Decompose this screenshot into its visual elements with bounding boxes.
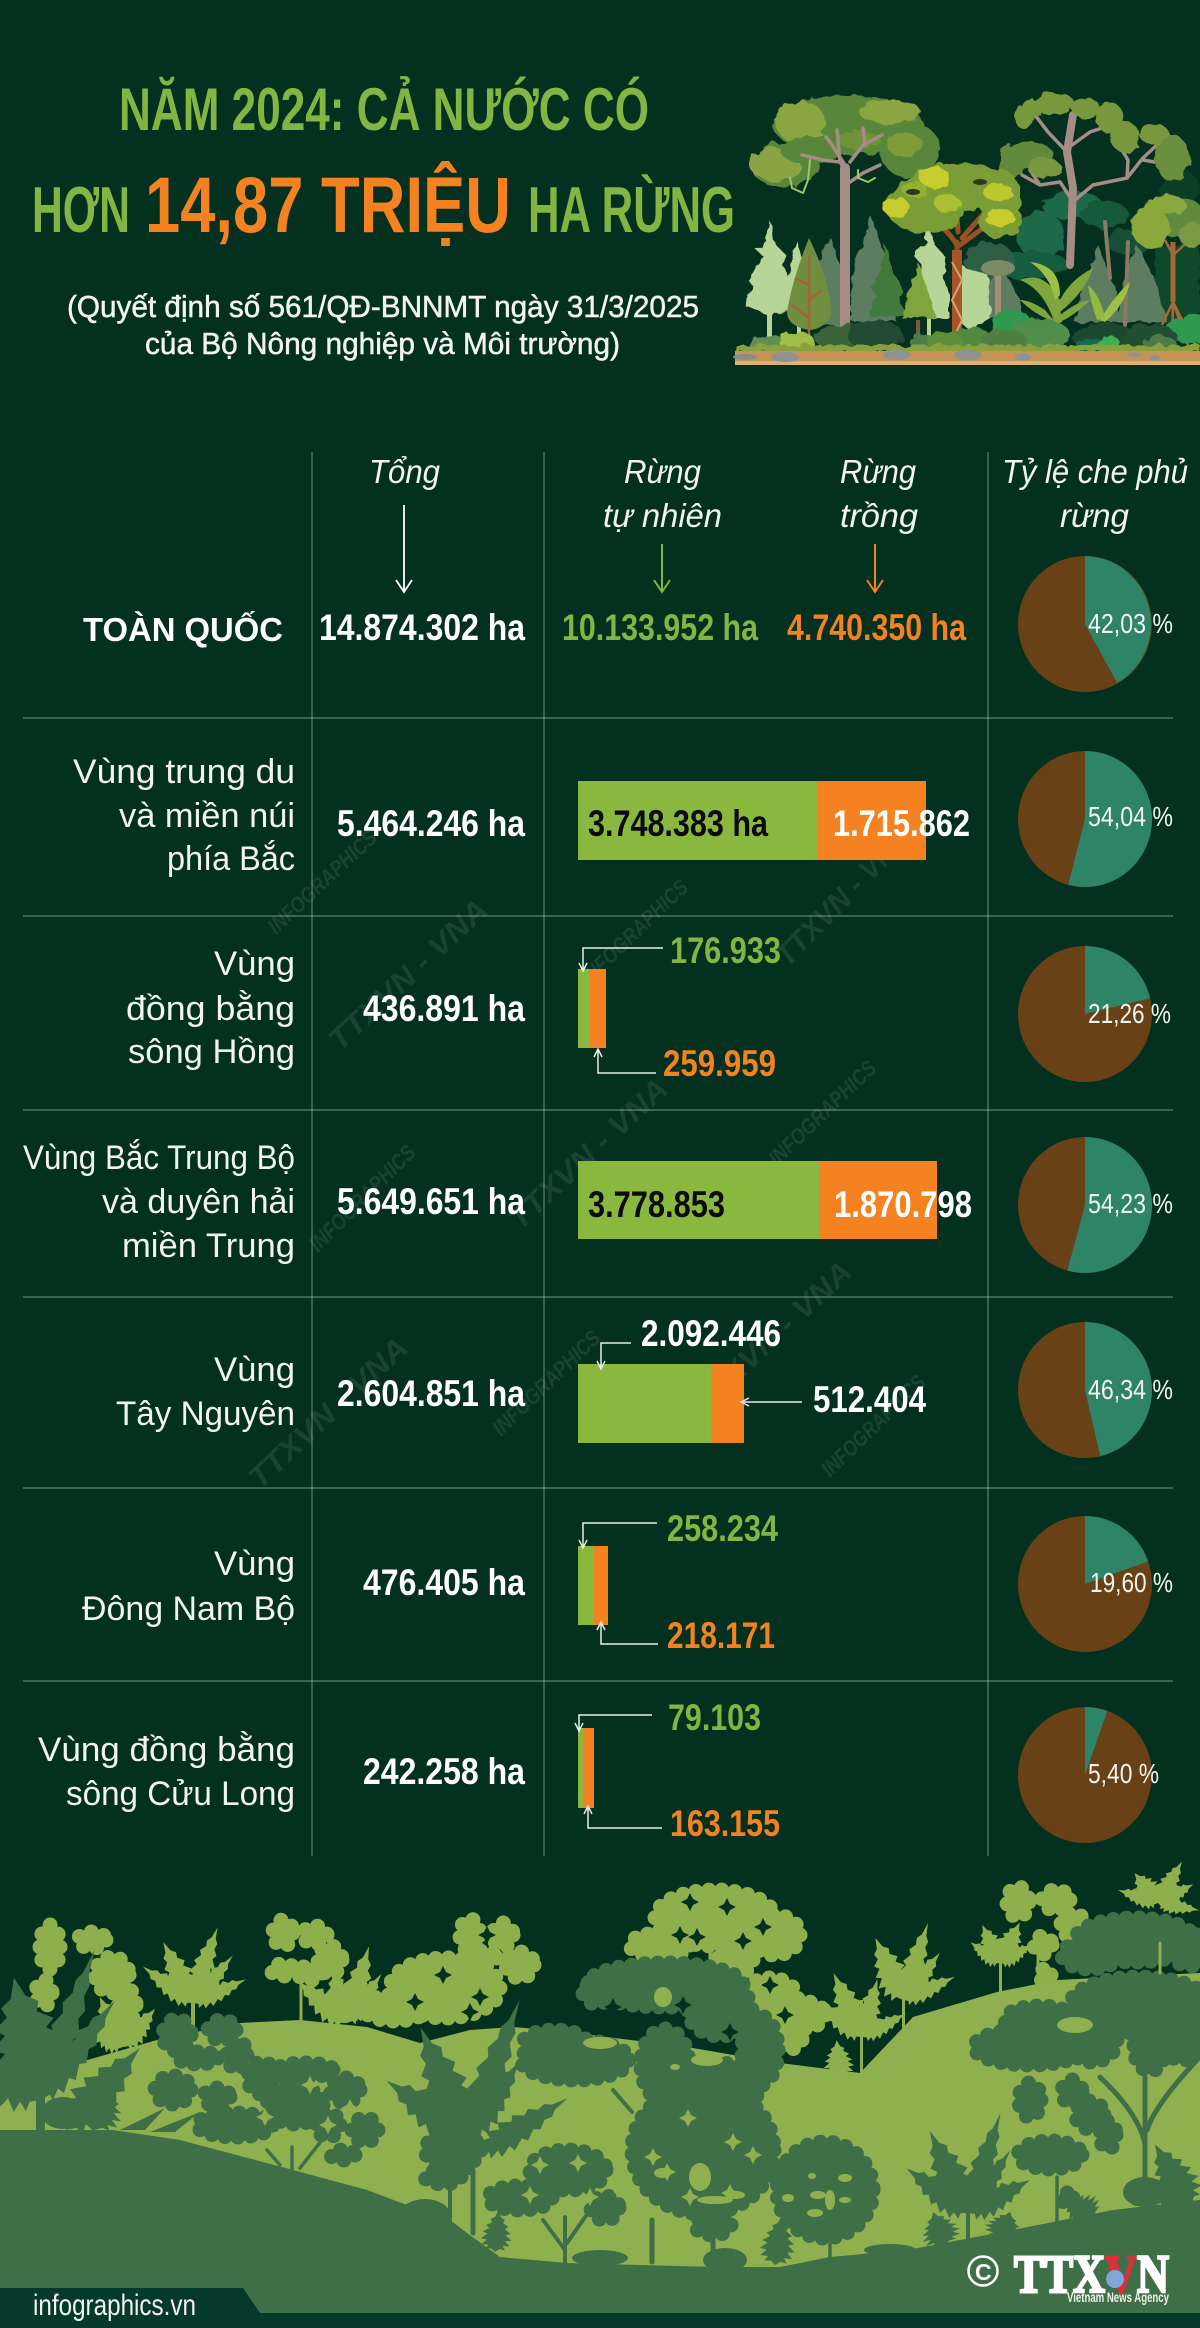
header: forest cover rate: Tỷ lệ che phủ bbox=[1002, 453, 1188, 490]
row: North Central and Central Coast bbox=[23, 1137, 1173, 1273]
header: total: Tổng bbox=[369, 453, 441, 490]
pie bbox=[1018, 946, 1171, 1082]
watermarks: INFOGRAPHICS bbox=[262, 825, 382, 939]
row: northern midlands and mountains: phía Bắc bbox=[167, 840, 295, 878]
header: natural forest: Rừng bbox=[624, 453, 702, 490]
stacked bar with callouts bbox=[575, 1697, 780, 1844]
pie bbox=[1018, 1707, 1159, 1843]
column headers bbox=[369, 453, 1188, 592]
pie: 21,26 % bbox=[1088, 998, 1171, 1029]
pie: national cover: 42,03 % bbox=[1088, 608, 1173, 639]
watermarks: INFOGRAPHICS bbox=[763, 1055, 881, 1171]
palms and ferns bbox=[0, 1944, 1200, 2272]
back light tree stems and gaps bbox=[301, 1893, 1038, 2024]
foreground dark hill bbox=[0, 2130, 1200, 2328]
table grid bbox=[23, 452, 1173, 1856]
stacked bar with callouts: 258.234 bbox=[667, 1508, 778, 1549]
stacked bar: 1.870.798 bbox=[834, 1184, 972, 1225]
header: planted forest: trồng bbox=[840, 497, 919, 534]
canopy left tree bbox=[749, 95, 940, 187]
header: total bbox=[369, 453, 441, 592]
palms behind bbox=[965, 191, 1150, 282]
pie bbox=[1018, 1137, 1173, 1273]
pie: 5,40 % bbox=[1088, 1758, 1159, 1789]
banana plants bbox=[1020, 262, 1130, 325]
row: Central Highlands bbox=[116, 1313, 1173, 1458]
dark tree behind right bbox=[1155, 170, 1200, 325]
logo: TTXVN: C bbox=[975, 2259, 992, 2285]
pie: 54,04 % bbox=[1088, 801, 1173, 832]
undergrowth bbox=[735, 310, 1200, 354]
watermarks: TTXVN - VNA bbox=[769, 820, 918, 973]
trunk and branches of left tree bbox=[790, 128, 882, 328]
row: North Central and Central Coast: miền Trung bbox=[122, 1227, 295, 1265]
pie bbox=[1018, 1516, 1173, 1652]
row: Red River delta bbox=[126, 930, 1171, 1084]
stacked bar with callouts: 259.959 bbox=[663, 1043, 776, 1084]
back light trees bbox=[36, 1887, 1085, 2049]
footer band bbox=[0, 2313, 1200, 2328]
logo: TTXVN: TTXVN bbox=[1014, 2244, 1169, 2304]
row: Mekong Delta: 242.258 ha bbox=[363, 1751, 525, 1792]
row: North Central and Central Coast: Vùng Bắc Trung Bộ bbox=[23, 1139, 295, 1177]
row: North Central and Central Coast: 5.649.651 ha bbox=[337, 1181, 525, 1222]
stacked bar with callouts: 218.171 bbox=[667, 1615, 775, 1656]
header: forest cover rate: rừng bbox=[1060, 497, 1130, 534]
trunks back bbox=[1022, 115, 1160, 325]
title line 2 suffix: HA RỪNG bbox=[528, 173, 735, 246]
row: Southeast bbox=[82, 1508, 1173, 1656]
stacked bar with callouts: 163.155 bbox=[670, 1803, 780, 1844]
row: northern midlands and mountains: 5.464.246 ha bbox=[337, 803, 525, 844]
header: planted forest: Rừng bbox=[840, 453, 917, 490]
title highlighted figure: 14,87 TRIỆU bbox=[145, 160, 511, 249]
back light plants bbox=[82, 1856, 1200, 2079]
row: Mekong Delta: Vùng đồng bằng bbox=[38, 1731, 295, 1769]
light green hill bbox=[0, 1973, 1200, 2320]
stacked bar bbox=[578, 1161, 972, 1239]
stacked bar with callouts bbox=[578, 1508, 778, 1656]
dark and bright green pines bbox=[867, 245, 936, 318]
row: national total bbox=[83, 556, 1173, 692]
gaps in dark canopies bbox=[256, 1987, 1093, 2217]
title line 2 prefix: HƠN bbox=[32, 173, 130, 246]
stacked bar with callouts: 512.404 bbox=[813, 1379, 926, 1420]
stacked bar with callouts bbox=[578, 930, 781, 1084]
pie: 19,60 % bbox=[1090, 1567, 1173, 1598]
row: Central Highlands: 2.604.851 ha bbox=[337, 1373, 525, 1414]
illustration: rainforest bbox=[733, 93, 1200, 365]
watermarks: TTXVN - VNA bbox=[686, 1255, 859, 1419]
row: Red River delta: Vùng bbox=[214, 945, 295, 983]
header: natural forest bbox=[603, 453, 722, 592]
stacked bar bbox=[578, 781, 970, 860]
row: Central Highlands: Tây Nguyên bbox=[116, 1395, 295, 1433]
row: northern midlands and mountains bbox=[73, 751, 1173, 887]
row: Red River delta: sông Hồng bbox=[128, 1033, 295, 1071]
stacked bar with callouts: 2.092.446 bbox=[641, 1313, 781, 1354]
light conifers bbox=[744, 220, 990, 330]
subtitle: (Quyết định số 561/QĐ-BNNMT ngày 31/3/2025 bbox=[67, 289, 699, 324]
stacked bar with callouts: 79.103 bbox=[668, 1697, 761, 1738]
stacked bar: 3.778.853 bbox=[588, 1184, 725, 1225]
row: Mekong Delta bbox=[38, 1697, 1159, 1844]
pie: 54,23 % bbox=[1088, 1188, 1173, 1219]
subtitle: của Bộ Nông nghiệp và Môi trường) bbox=[145, 326, 620, 361]
watermarks: TTXVN - VNA bbox=[502, 1072, 675, 1236]
watermarks: INFOGRAPHICS bbox=[304, 1140, 421, 1257]
row: Southeast: Vùng bbox=[214, 1545, 295, 1583]
watermarks: INFOGRAPHICS bbox=[816, 1370, 931, 1482]
row: Red River delta: 436.891 ha bbox=[363, 988, 525, 1029]
watermarks: TTXVN - VNA bbox=[242, 1331, 415, 1495]
illustration: silhouette forest landscape bbox=[0, 1856, 1200, 2328]
row: Mekong Delta: sông Cửu Long bbox=[66, 1775, 295, 1813]
row: Southeast: 476.405 ha bbox=[363, 1562, 525, 1603]
title line 1: NĂM 2024: CẢ NƯỚC CÓ bbox=[119, 76, 649, 143]
row: national total: 10.133.952 ha bbox=[562, 607, 758, 648]
header: natural forest: tự nhiên bbox=[603, 497, 722, 534]
cone tree bbox=[787, 238, 831, 345]
row: Central Highlands: Vùng bbox=[214, 1351, 295, 1389]
row: national total: 4.740.350 ha bbox=[787, 607, 966, 648]
bright central tree bbox=[883, 163, 1022, 338]
watermarks: TTXVN - VNA bbox=[322, 893, 495, 1057]
title bbox=[32, 76, 735, 249]
row: Red River delta: đồng bằng bbox=[126, 990, 295, 1028]
pie bbox=[1018, 751, 1173, 887]
canopy right large tree bbox=[999, 93, 1189, 181]
stacked bar with callouts bbox=[578, 1313, 926, 1443]
right tree with roots bbox=[1131, 195, 1200, 345]
grey-green conifers bbox=[816, 217, 1167, 325]
footer tab: website bbox=[0, 2288, 260, 2328]
watermarks: INFOGRAPHICS bbox=[487, 1325, 605, 1441]
row: national total: TOÀN QUỐC bbox=[83, 610, 283, 648]
row: national total: 14.874.302 ha bbox=[319, 607, 525, 648]
row: North Central and Central Coast: và duyên hải bbox=[102, 1183, 295, 1221]
dark tree silhouettes bbox=[0, 1918, 1200, 2272]
header: planted forest bbox=[840, 453, 919, 592]
pie: 46,34 % bbox=[1088, 1374, 1173, 1405]
row: northern midlands and mountains: và miền núi bbox=[119, 797, 295, 835]
stacked bar with callouts: 176.933 bbox=[670, 930, 781, 971]
watermarks bbox=[242, 820, 931, 1495]
pie bbox=[1018, 1322, 1173, 1458]
scalloped dark canopies bbox=[155, 1918, 1200, 2238]
palm trunk with fan bbox=[981, 260, 1015, 338]
conifer stems bbox=[767, 308, 931, 342]
stacked bar: 3.748.383 ha bbox=[588, 803, 768, 844]
header: forest cover rate bbox=[1002, 453, 1188, 534]
ground strip bbox=[733, 350, 1200, 365]
watermarks: INFOGRAPHICS bbox=[575, 874, 693, 990]
footer tab: website: infographics.vn bbox=[33, 2289, 196, 2322]
row: Southeast: Đông Nam Bộ bbox=[82, 1590, 295, 1628]
row: northern midlands and mountains: Vùng trung du bbox=[73, 753, 295, 791]
pie: national cover bbox=[1018, 556, 1173, 692]
trunks bbox=[267, 1943, 1197, 2268]
subtitle bbox=[67, 289, 699, 361]
stacked bar: 1.715.862 bbox=[833, 803, 970, 844]
